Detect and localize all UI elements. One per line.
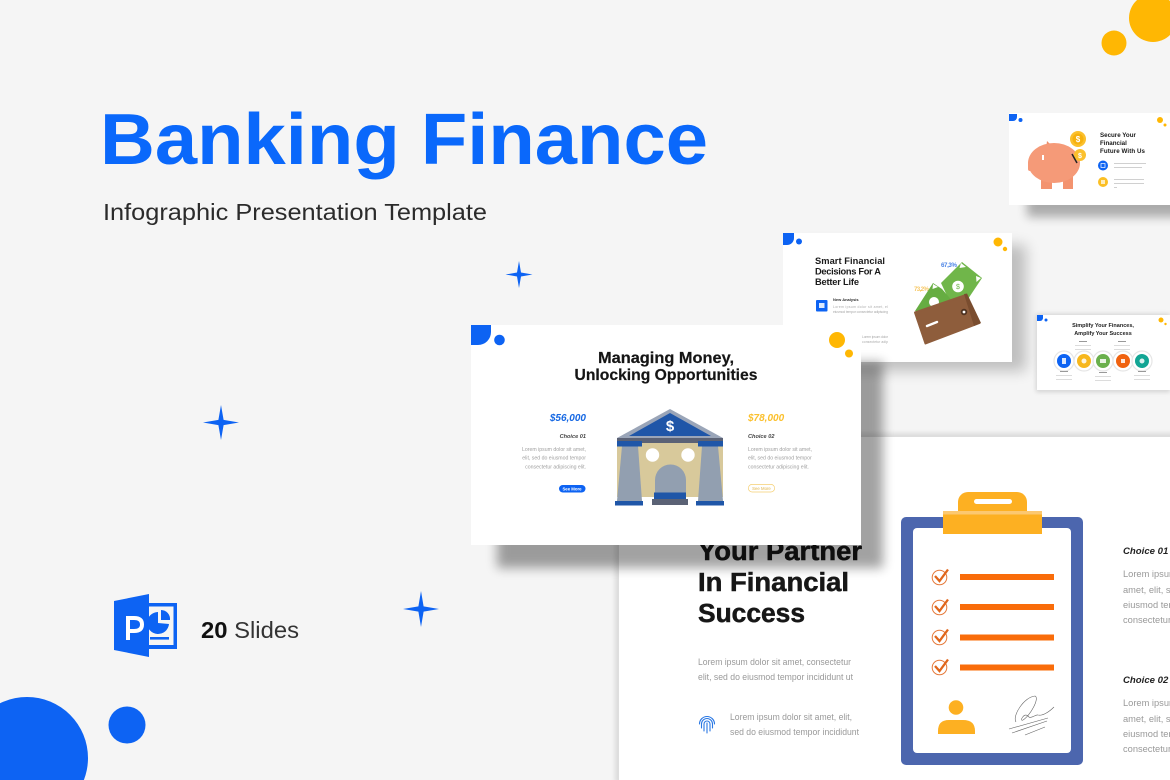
choice 01 column: $56,000: [549, 413, 586, 424]
choice 01 column: consectetur adipiscing elit.: [525, 464, 586, 470]
icon: wallet with cash: [915, 262, 982, 344]
choice 02 column: Choice 02: [748, 434, 775, 440]
slide heading: Managing Money,: [598, 350, 734, 367]
shadow: wallet slide: [800, 245, 1026, 371]
panel: main bank slide: [471, 325, 861, 545]
label: 73,2%: 73,2%: [914, 286, 929, 293]
icon: piggy bank: $: [1078, 153, 1082, 160]
yellow marks: [994, 238, 1007, 251]
subtitle: Infographic Presentation Template: [103, 199, 487, 225]
step circles: [1054, 351, 1152, 371]
choice 01 column: [522, 413, 586, 492]
title: Banking Finance: [100, 99, 708, 180]
slide heading: Your Partner: [698, 538, 862, 566]
slide heading: Smart Financial: [815, 256, 885, 266]
panel: partner slide: [615, 433, 1170, 780]
slide count: 20 Slides: [201, 617, 299, 643]
label: 67,3%: 67,3%: [941, 262, 957, 269]
choice 02 text: [1123, 675, 1170, 754]
icon: clipboard: [901, 492, 1083, 765]
button: see more blue: See More: [562, 486, 582, 492]
analysis text: New Analysis: [833, 297, 859, 302]
panel: piggy slide: [1009, 113, 1170, 205]
slide heading: Unlocking Opportunities: [574, 367, 758, 384]
feature icons: [1098, 160, 1108, 187]
icon: analysis square: [816, 300, 828, 312]
slide heading: Secure Your: [1100, 132, 1136, 139]
decorative circles: top right: [1102, 0, 1170, 56]
analysis text: consectetur adip: [862, 340, 888, 344]
icon: sparkle star left: [203, 405, 239, 440]
yellow marks: [1158, 318, 1167, 325]
shadow: piggy slide: [1027, 160, 1170, 217]
slide heading: Future With Us: [1100, 148, 1146, 155]
slide heading: Success: [698, 600, 805, 628]
slide corner marks: [471, 325, 505, 345]
checklist: [932, 570, 1054, 675]
step captions: [1056, 341, 1150, 381]
choice 01 column: Lorem ipsum dolor sit amet,: [522, 447, 586, 453]
choice 02 column: $78,000: [747, 413, 785, 424]
choice 01 text: [1123, 546, 1170, 625]
choice 02 text: Choice 02: [1123, 675, 1169, 686]
feature text: sed do eiusmod tempor incididunt: [730, 727, 859, 737]
yellow marks: [1157, 117, 1166, 126]
choice 02 column: elit, sed do eiusmod tempor: [748, 456, 812, 462]
icon: wallet with cash: $: [956, 284, 960, 291]
panel: simplify slide: [1036, 314, 1170, 392]
analysis text: Lorem ipsum dolor: [862, 335, 889, 339]
shadow: main slide: [497, 362, 883, 568]
analysis text: [833, 297, 889, 344]
body text: Lorem ipsum dolor sit amet, consectetur: [698, 657, 851, 667]
feature text: [1114, 163, 1146, 188]
choice 02 column: Lorem ipsum dolor sit amet,: [748, 447, 812, 453]
icon: sparkle star bottom: [403, 591, 439, 627]
slide corner marks: [1009, 114, 1022, 122]
slide heading: Financial: [1100, 140, 1127, 147]
choice 02 column: [747, 413, 812, 492]
body text: elit, sed do eiusmod tempor incididunt ut: [698, 672, 853, 682]
slide heading: In Financial: [698, 569, 849, 597]
icon: piggy bank: $: [1076, 135, 1081, 144]
panel: wallet slide: [783, 233, 1012, 362]
feature text: Lorem ipsum dolor sit amet, elit,: [730, 712, 852, 722]
slide heading: Better Life: [815, 277, 859, 287]
icon: piggy bank: [1028, 131, 1086, 189]
choice 02 column: consectetur adipiscing elit.: [748, 464, 809, 470]
yellow marks: [829, 332, 853, 358]
slide heading: Amplify Your Success: [1074, 331, 1132, 337]
analysis text: Lorem ipsum dolor sit amet, el: [833, 305, 888, 309]
icon: fingerprint: [700, 717, 714, 733]
signature: [1009, 696, 1054, 735]
icon: bank building: [615, 409, 724, 506]
slide heading: Simplify Your Finances,: [1072, 323, 1134, 329]
icon: sparkle star top: [506, 261, 532, 288]
icon: bank building: $: [666, 418, 675, 435]
slide heading: Decisions For A: [815, 266, 881, 276]
analysis text: eiusmod tempor consectetur adipiscing: [833, 310, 888, 314]
choice 01 column: elit, sed do eiusmod tempor: [522, 456, 586, 462]
choice 01 column: Choice 01: [560, 434, 586, 440]
slide corner marks: [783, 233, 802, 245]
button: see more outline: See More: [752, 486, 771, 491]
slide corner marks: [1037, 315, 1048, 322]
icon: person: [938, 700, 975, 734]
choice 01 text: Choice 01: [1123, 546, 1168, 557]
decorative circles: bottom left: [0, 697, 146, 780]
icon: PowerPoint: [114, 594, 177, 657]
